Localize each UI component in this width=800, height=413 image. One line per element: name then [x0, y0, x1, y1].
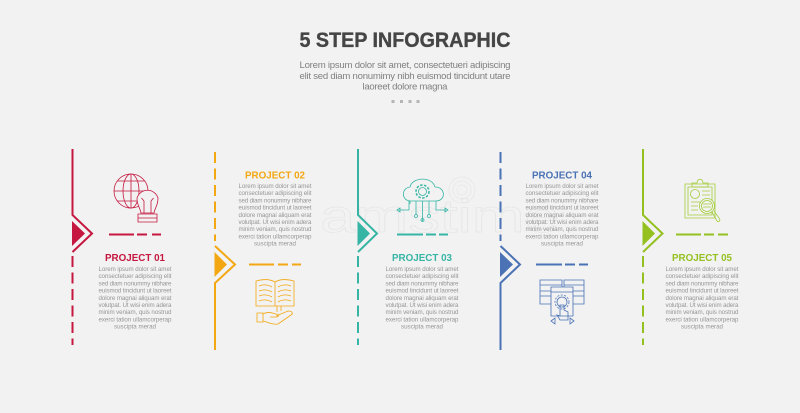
step 1 timeline — [72, 149, 92, 345]
project 03 text: suscipta merad — [401, 324, 444, 331]
step 4 divider — [536, 264, 588, 266]
project 02 text: euismod tincidunt ut laoreet — [238, 205, 312, 212]
project 05 text: euismod tincidunt ut laoreet — [666, 288, 739, 295]
project 01 text: Lorem ipsum dolor sit amet — [98, 266, 172, 273]
step 2 divider — [249, 264, 301, 266]
icon: web windows with pointer — [540, 280, 584, 324]
project 03 text: sed diam nonummy nibhare — [386, 280, 459, 287]
step 3 divider — [397, 234, 448, 236]
step 2 timeline — [215, 152, 235, 350]
icon: clipboard with magnifier — [685, 179, 720, 222]
project 03 heading: PROJECT 03 — [392, 253, 452, 264]
project 04 text: Lorem ipsum dolor sit amet — [526, 183, 599, 190]
project 01 text: volutpat. Ut wisi enim adera — [98, 302, 172, 309]
project 02 text: volutpat. Ut wisi enim adera — [238, 219, 312, 226]
step 4 timeline — [500, 152, 520, 350]
project 04 text: sed diam nonummy nibhare — [526, 197, 599, 204]
project 02 text: minim veniam, quis nostrud — [238, 226, 312, 233]
project 01 text: exerci tation ullamcorperap — [98, 316, 172, 323]
step 1 — [72, 149, 172, 345]
project 02 text — [238, 183, 312, 248]
project 03 text: Lorem ipsum dolor sit amet — [386, 266, 459, 273]
icon: cloud network — [397, 179, 448, 222]
step 5 divider — [676, 234, 728, 236]
step 5 timeline — [643, 149, 662, 345]
step 5 arrow marker — [642, 221, 655, 246]
project 03 text — [386, 266, 459, 331]
project 04 heading: PROJECT 04 — [532, 170, 592, 182]
project 01 text: minim veniam, quis nostrud — [98, 309, 172, 316]
step 3 arrow marker — [358, 221, 370, 246]
project 01 text: dolore magnai aliquam erat — [98, 295, 172, 302]
project 01 text — [98, 266, 172, 331]
project 05 heading: PROJECT 05 — [672, 253, 732, 264]
project 01 heading: PROJECT 01 — [105, 253, 165, 264]
project 03 text: minim veniam, quis nostrud — [386, 309, 459, 316]
step 1 arrow marker — [72, 221, 85, 246]
project 04 text: exerci tation ullamcorperap — [526, 233, 599, 240]
project 05 text: consectetuer adipiscing elit — [666, 273, 739, 280]
subtitle: elit sed diam nonumimy nibh euismod tincidunt utare — [300, 71, 510, 82]
step 4 — [500, 152, 599, 350]
step 5 — [642, 149, 739, 345]
project 04 text: euismod tincidunt ut laoreet — [526, 205, 599, 212]
step 2 arrow marker — [214, 252, 227, 277]
project 05 text: dolore magnai aliquam erat — [666, 295, 739, 302]
project 05 text: Lorem ipsum dolor sit amet — [666, 266, 739, 273]
icon: open book on hand — [256, 280, 294, 324]
subtitle: laoreet dolore magna — [362, 82, 448, 92]
subtitle: Lorem ipsum dolor sit amet, consectetueri adipiscing — [300, 60, 510, 71]
title: 5 STEP INFOGRAPHIC — [300, 29, 510, 52]
project 05 text — [666, 266, 739, 331]
project 02 heading: PROJECT 02 — [245, 170, 305, 182]
project 04 text — [526, 183, 599, 248]
project 02 text: dolore magnai aliquam erat — [238, 212, 312, 219]
project 02 text: Lorem ipsum dolor sit amet — [238, 183, 312, 190]
subtitle — [300, 60, 510, 92]
project 05 text: minim veniam, quis nostrud — [666, 309, 739, 316]
project 05 text: suscipta merad — [681, 324, 724, 331]
project 02 text: consectetuer adipiscing elit — [238, 190, 312, 197]
project 04 text: suscipta merad — [541, 241, 584, 248]
project 02 text: sed diam nonummy nibhare — [238, 197, 312, 204]
project 03 text: volutpat. Ut wisi enim adera — [386, 302, 459, 309]
project 01 text: sed diam nonummy nibhare — [98, 280, 172, 287]
icon: globe and light bulb — [114, 174, 158, 222]
project 01 text: consectetuer adipiscing elit — [98, 273, 172, 280]
project 05 text: exerci tation ullamcorperap — [666, 316, 739, 323]
project 04 text: volutpat. Ut wisi enim adera — [526, 219, 599, 226]
project 03 text: euismod tincidunt ut laoreet — [386, 288, 459, 295]
step 1 divider — [109, 234, 161, 236]
step 2 — [214, 152, 312, 350]
watermark — [320, 177, 560, 242]
project 03 text: consectetuer adipiscing elit — [386, 273, 459, 280]
project 01 text: euismod tincidunt ut laoreet — [98, 288, 172, 295]
project 01 text: suscipta merad — [114, 324, 157, 331]
project 02 text: suscipta merad — [254, 241, 297, 248]
project 05 text: sed diam nonummy nibhare — [666, 280, 739, 287]
step 3 timeline — [358, 149, 377, 345]
watermark: amstime — [320, 190, 560, 242]
project 04 text: minim veniam, quis nostrud — [526, 226, 599, 233]
project 03 text: dolore magnai aliquam erat — [386, 295, 459, 302]
project 04 text: consectetuer adipiscing elit — [526, 190, 599, 197]
project 03 text: exerci tation ullamcorperap — [386, 316, 459, 323]
pagination dots — [392, 100, 420, 103]
project 05 text: volutpat. Ut wisi enim adera — [666, 302, 739, 309]
step 4 arrow marker — [500, 252, 513, 277]
project 04 text: dolore magnai aliquam erat — [526, 212, 599, 219]
step 3 — [358, 149, 459, 345]
project 02 text: exerci tation ullamcorperap — [238, 233, 312, 240]
